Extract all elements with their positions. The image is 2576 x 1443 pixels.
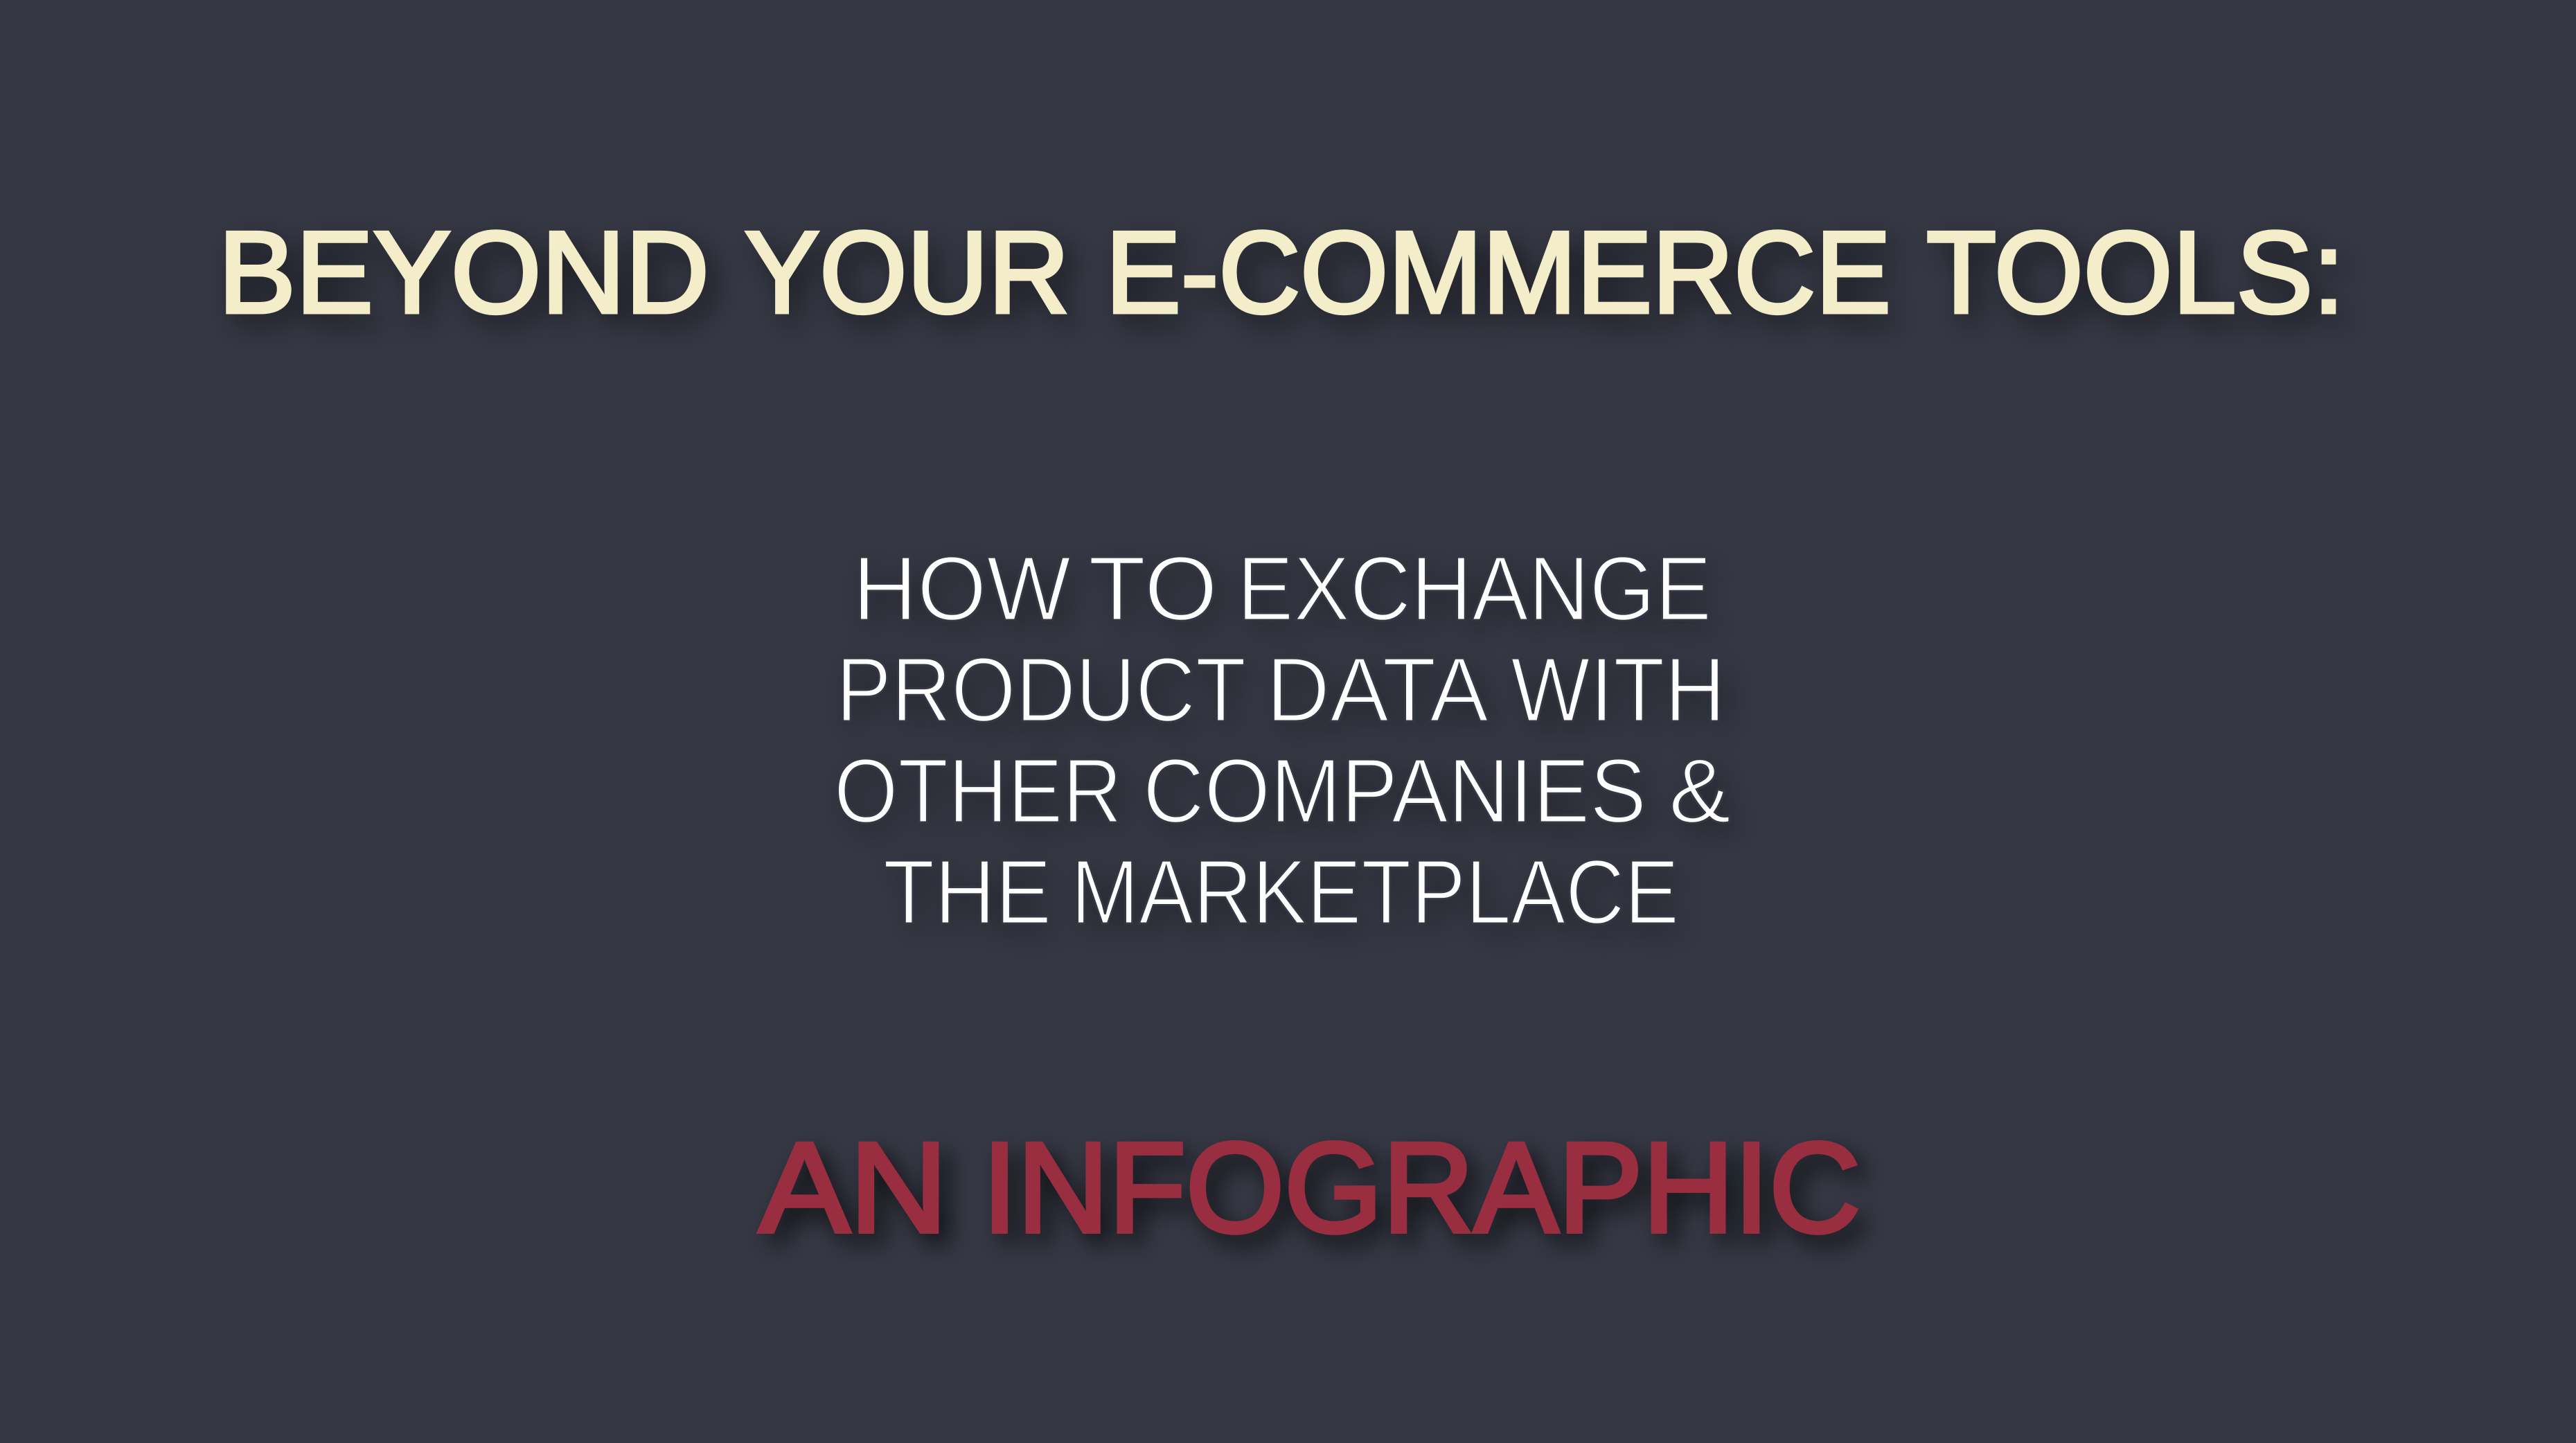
subtitle xyxy=(834,538,1731,943)
subtitle: EXCHANGE xyxy=(1237,538,1712,639)
subtitle: MARKETPLACE xyxy=(1071,841,1679,943)
subtitle: & xyxy=(1669,740,1731,842)
subtitle: PRODUCT xyxy=(836,639,1246,741)
title: BEYOND xyxy=(218,207,709,337)
subtitle: OTHER xyxy=(834,740,1122,842)
subtitle: COMPANIES xyxy=(1143,740,1646,842)
subtitle: WITH xyxy=(1511,639,1725,741)
title: YOUR xyxy=(745,207,1069,337)
title: E-COMMERCE xyxy=(1105,207,1891,337)
tagline: an infographic: AN xyxy=(759,1117,948,1259)
title: TOOLS: xyxy=(1926,207,2345,337)
subtitle: DATA xyxy=(1266,639,1489,741)
subtitle: HOW xyxy=(853,538,1071,639)
subtitle: TO xyxy=(1088,538,1218,639)
tagline: an infographic: INFOGRAPHIC xyxy=(982,1117,1860,1259)
title xyxy=(218,207,2345,337)
subtitle: THE xyxy=(883,841,1051,943)
